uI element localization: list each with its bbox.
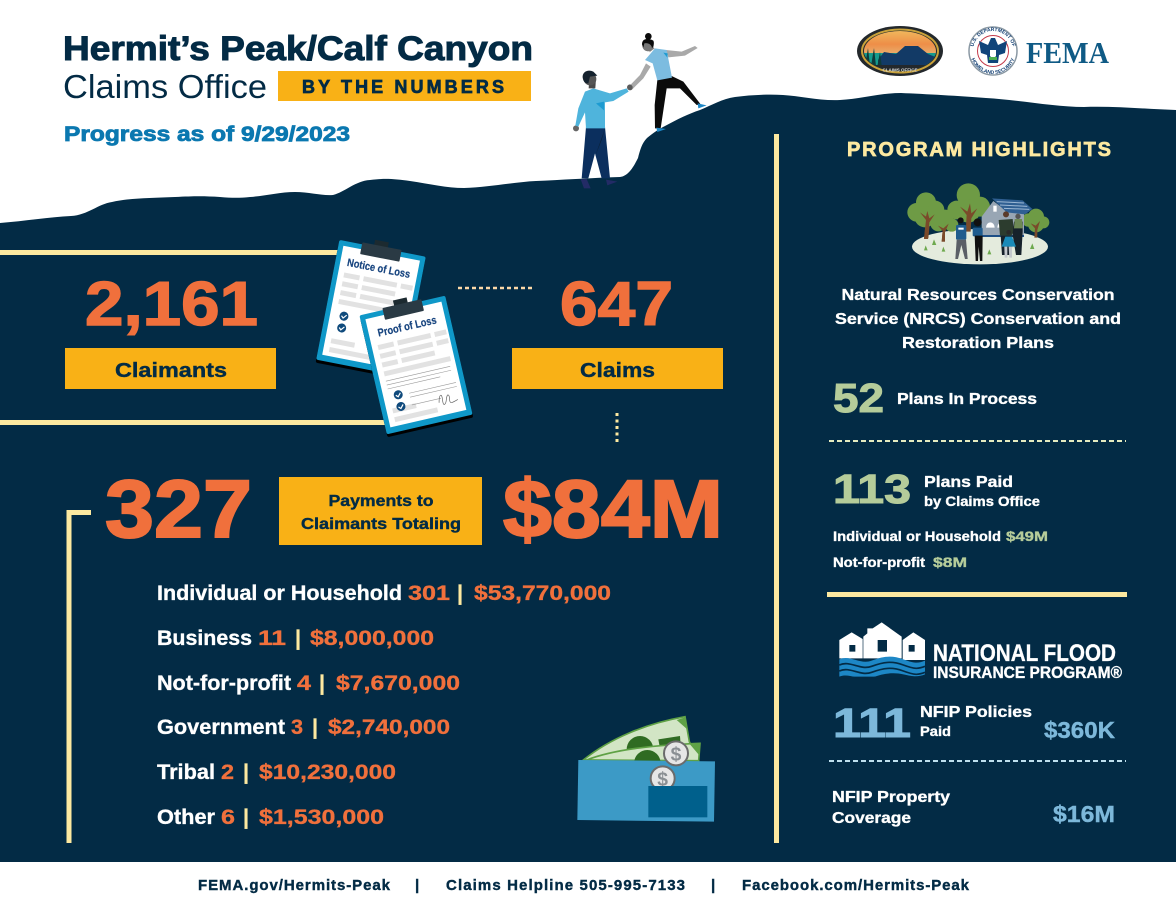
row: not-for-profit: 4: [297, 671, 311, 695]
stat: plans paid: $49M: [1006, 528, 1048, 544]
logo: national flood insurance program: INSURANCE PROGRAM®: [933, 663, 1122, 682]
stat: plans in process: [833, 375, 1037, 421]
title: Hermit’s Peak/Calf Canyon: [63, 30, 533, 68]
footer: [198, 877, 970, 894]
stat: NFIP policies: Paid: [920, 723, 951, 739]
logo: DHS seal: U.S. DEPARTMENT OF: [970, 28, 1016, 46]
stat: plans paid: by Claims Office: [924, 493, 1040, 509]
logo: DHS seal: HOMELAND SECURITY: [972, 58, 1014, 74]
stat: claims: Claims: [580, 360, 655, 382]
man: [573, 71, 633, 188]
stat: NFIP property coverage: NFIP Property: [832, 789, 950, 806]
row: business: $8,000,000: [310, 626, 434, 650]
subtitle: Claims Office: [63, 68, 267, 105]
stat: plans paid: $8M: [933, 554, 967, 570]
row: individual or household: |: [457, 581, 463, 605]
row: other: [157, 805, 384, 829]
woman: [627, 33, 707, 132]
footer: |: [415, 877, 419, 894]
bracket: payments: [69, 512, 91, 843]
footer: Claims Helpline 505-995-7133: [446, 877, 685, 894]
stat: NFIP property coverage: [832, 789, 1115, 827]
row: not-for-profit: [157, 671, 460, 695]
logo: DHS seal: [968, 26, 1018, 76]
stat: plans paid: 113: [833, 466, 911, 512]
row: business: Business: [157, 626, 252, 650]
illustration: two people climbing: [573, 33, 707, 188]
by the numbers banner: [278, 71, 531, 101]
stat: NFIP policies: NFIP Policies: [920, 704, 1032, 721]
logo: FEMA wordmark: FEMA: [1026, 35, 1110, 70]
row: not-for-profit: $7,670,000: [336, 671, 460, 695]
logo: national flood insurance program: [839, 622, 1122, 682]
row: business: 11: [258, 626, 286, 650]
row: tribal: Tribal: [157, 760, 215, 784]
stat: claimants: [65, 270, 276, 389]
connector: dotted horizontal: [458, 287, 533, 289]
icon: proof of loss clipboard: [358, 289, 473, 437]
stat: plans paid: [833, 466, 1048, 570]
row: tribal: 2: [221, 760, 234, 784]
stat: plans in process: 52: [833, 375, 884, 421]
by the numbers banner: BY THE NUMBERS: [302, 77, 504, 97]
payment breakdown list: [157, 581, 611, 829]
stat: payments: Claimants Totaling: [301, 516, 461, 533]
stat: plans in process: Plans In Process: [897, 391, 1037, 408]
row: government: $2,740,000: [328, 715, 450, 739]
icon: wallet with cash: [577, 717, 715, 822]
row: other: |: [243, 805, 249, 829]
text: NRCS description: [835, 287, 1121, 352]
footer: |: [711, 877, 715, 894]
row: business: |: [295, 626, 301, 650]
row: other: 6: [221, 805, 235, 829]
stat: payments: Payments to: [328, 493, 434, 510]
divider: program highlights column: [774, 134, 779, 843]
row: tribal: $10,230,000: [259, 760, 396, 784]
stat: payments: $84M: [503, 464, 723, 555]
footer: Facebook.com/Hermits-Peak: [742, 877, 970, 894]
stat: NFIP property coverage: $16M: [1053, 801, 1115, 827]
text: NRCS description: Restoration Plans: [902, 335, 1054, 352]
stat: claimants: 2,161: [85, 270, 258, 339]
stat: claims: [512, 270, 723, 389]
text: NRCS description: Service (NRCS) Conservation and: [835, 311, 1121, 328]
footer: FEMA.gov/Hermits-Peak: [198, 877, 391, 894]
stat: NFIP policies: 111: [833, 700, 911, 746]
row: government: 3: [291, 715, 303, 739]
row: individual or household: 301: [408, 581, 450, 605]
stat: plans paid: Plans Paid: [924, 474, 1013, 491]
logo: national flood insurance program: NATIONAL FLOOD: [933, 640, 1116, 667]
row: individual or household: [157, 581, 611, 605]
stat: plans paid: Individual or Household: [833, 528, 1001, 544]
row: not-for-profit: Not-for-profit: [157, 671, 291, 695]
stat: claimants: Claimants: [115, 360, 227, 382]
row: government: [157, 715, 450, 739]
stat: payments: 327: [105, 464, 252, 555]
row: government: Government: [157, 715, 285, 739]
heading: PROGRAM HIGHLIGHTS: [847, 139, 1111, 161]
icon: wallet with cash: $: [671, 744, 682, 765]
logo: claims office seal: [857, 26, 943, 76]
stat: claims: 647: [560, 270, 673, 339]
row: business: [157, 626, 434, 650]
row: other: Other: [157, 805, 216, 829]
row: individual or household: $53,770,000: [474, 581, 611, 605]
icon: wallet with cash: $: [657, 769, 668, 790]
stat: plans paid: Not-for-profit: [833, 554, 925, 570]
stat: NFIP property coverage: Coverage: [832, 810, 911, 827]
connector: dotted vertical: [616, 413, 618, 445]
row: individual or household: Individual or Household: [157, 581, 402, 605]
progress date: Progress as of 9/29/2023: [64, 123, 350, 146]
stat: NFIP policies: $360K: [1044, 717, 1115, 743]
title block: [63, 30, 533, 146]
icon: notice of loss clipboard: Notice of Loss: [346, 257, 411, 281]
logo: claims office seal: CLAIMS OFFICE: [882, 68, 918, 72]
row: government: |: [312, 715, 318, 739]
row: tribal: [157, 760, 396, 784]
panel: program highlights: [827, 139, 1127, 827]
accent brackets around claimants: [0, 250, 385, 425]
icon: proof of loss clipboard: Proof of Loss: [377, 314, 438, 340]
text: NRCS description: Natural Resources Conservation: [842, 287, 1114, 304]
icon: notice of loss clipboard: [316, 233, 427, 379]
row: tribal: |: [243, 760, 249, 784]
stat: payments: [105, 464, 723, 555]
row: other: $1,530,000: [259, 805, 384, 829]
icon: families and house among trees: [907, 183, 1049, 264]
stat: NFIP policies: [833, 700, 1115, 746]
row: not-for-profit: |: [319, 671, 325, 695]
